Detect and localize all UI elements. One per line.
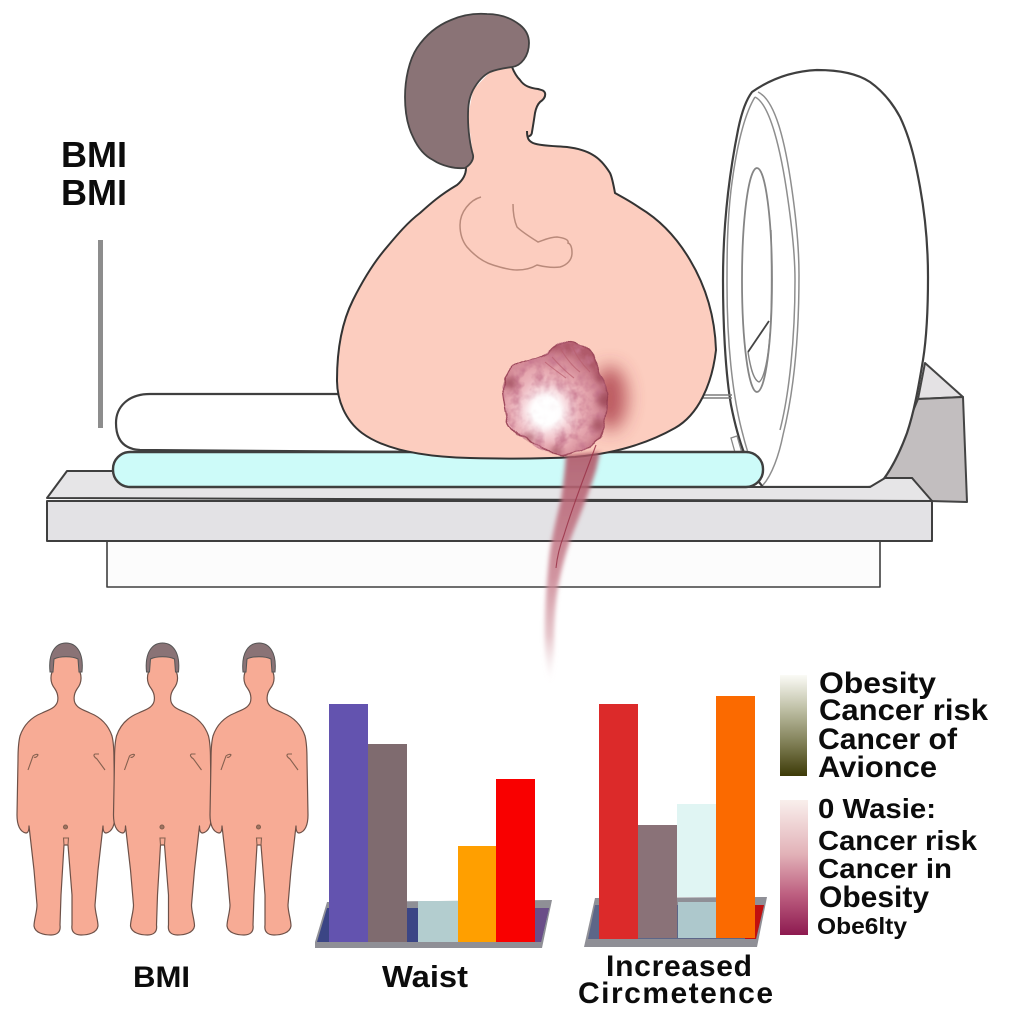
Increased Circumference caption: Circmetence [578, 977, 773, 1010]
legend: waist [780, 793, 977, 939]
tumour mass [502, 342, 608, 455]
table top surface [47, 471, 932, 501]
person body [17, 654, 115, 935]
scanner tab [731, 436, 742, 456]
table [47, 471, 932, 587]
patient outline [337, 67, 716, 459]
tumour glow [593, 366, 627, 430]
person hair [50, 643, 82, 672]
patient hair [405, 14, 529, 168]
legend text [818, 667, 988, 784]
legend text: Cancer of [818, 723, 958, 756]
tumour trail [545, 445, 600, 684]
legend text: Avionce [818, 751, 937, 784]
person details [28, 754, 105, 845]
legend text: Cancer in [818, 853, 952, 884]
mattress [113, 452, 763, 487]
person figure 3 [210, 643, 308, 935]
title: BMI label: BMI [61, 134, 127, 175]
person figure 1 [17, 643, 115, 935]
scanner base [885, 363, 967, 502]
scale bar [98, 240, 103, 428]
title: BMI label: BMI [61, 172, 127, 213]
scanner housing [723, 70, 928, 487]
title: BMI label [61, 134, 127, 213]
bar chart: circumference [584, 696, 767, 947]
legend text: Obe6lty [817, 913, 907, 939]
Increased Circumference caption [578, 950, 773, 1010]
legend text: 0 Wasie: [818, 793, 936, 824]
bar chart: waist [315, 704, 552, 948]
bars [329, 704, 368, 942]
legend text [817, 793, 977, 939]
legend text: Cancer risk [819, 694, 988, 727]
Increased Circumference caption: Increased [606, 950, 752, 983]
patient body [337, 67, 716, 459]
tumour [495, 335, 627, 460]
tumour highlight [512, 377, 580, 445]
pillow [116, 394, 732, 452]
scanner ring [727, 92, 799, 485]
legend gradient [780, 675, 807, 776]
chart platform [584, 897, 767, 947]
legend: obesity [780, 667, 988, 784]
scanner bore [742, 168, 772, 392]
legend text: Obesity [819, 881, 929, 914]
bars [599, 704, 638, 939]
legend gradient [780, 800, 808, 935]
person figure 2 [114, 643, 212, 935]
patient arm [460, 197, 572, 270]
tumour texture [502, 342, 608, 455]
legend text: Obesity [819, 667, 936, 700]
table front face [47, 501, 932, 541]
Waist caption: Waist [382, 959, 468, 994]
table lower block [107, 541, 880, 587]
legend text: Cancer risk [818, 825, 977, 856]
MRI scanner [723, 70, 967, 502]
chart platform [315, 900, 552, 948]
patient figure [337, 14, 716, 459]
BMI caption: BMI [133, 961, 190, 994]
